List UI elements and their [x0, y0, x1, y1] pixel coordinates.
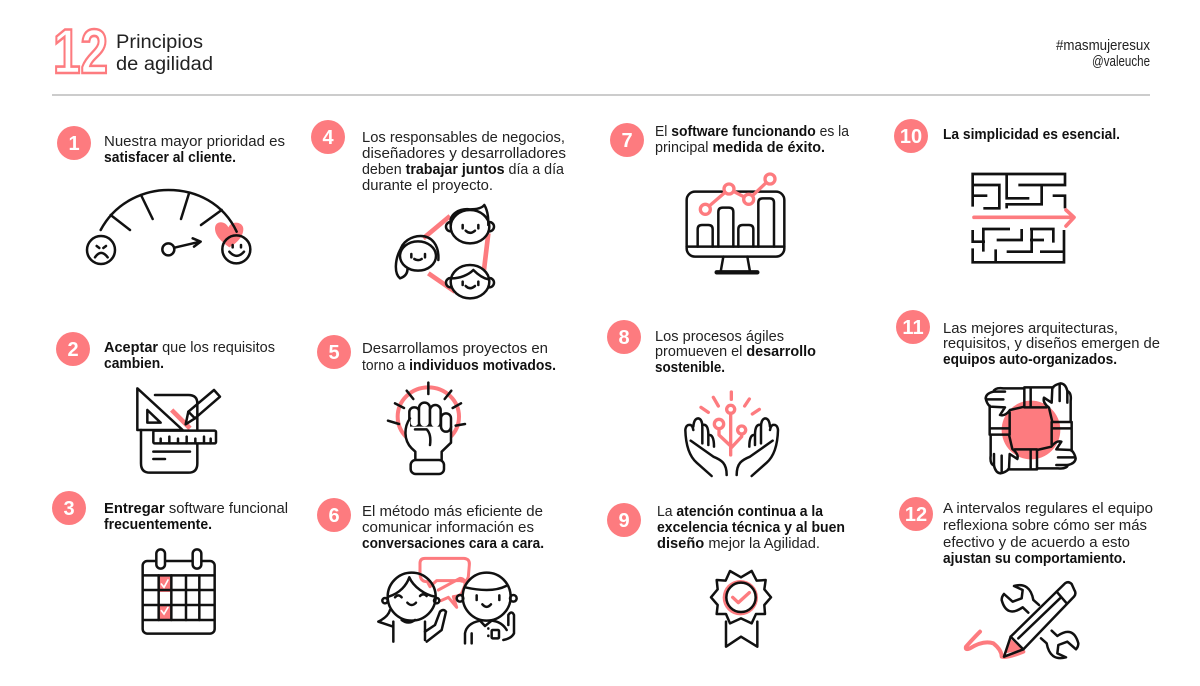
panel: principle 6 — [317, 498, 544, 643]
text 12: ajustan su comportamiento. — [943, 551, 1126, 567]
badge 6: 6 — [328, 505, 340, 527]
badge 8 — [607, 320, 641, 354]
icon: monitor with chart — [687, 174, 784, 272]
text 8 — [655, 329, 816, 376]
text 12: efectivo y de acuerdo a esto — [943, 535, 1130, 551]
badge 9 — [607, 503, 641, 537]
badge 7: 7 — [621, 130, 633, 152]
panel: principle 8 — [607, 320, 816, 476]
text 7: principal medida de éxito. — [655, 140, 825, 156]
text 11: Las mejores arquitecturas, — [943, 321, 1118, 337]
panel: principle 11 — [896, 310, 1160, 473]
icon: three connected people — [396, 205, 494, 298]
text 6: comunicar información es — [362, 520, 534, 536]
panel: principle 7 — [610, 123, 850, 272]
text 2 — [104, 340, 275, 372]
icon: satisfaction gauge — [87, 190, 250, 264]
icon: drawing tools — [137, 388, 220, 473]
badge 3: 3 — [63, 498, 75, 520]
text 2: cambien. — [104, 356, 164, 372]
text 10: La simplicidad es esencial. — [943, 127, 1120, 143]
text 12: reflexiona sobre cómo ser más — [943, 518, 1147, 534]
badge 12: 12 — [905, 504, 927, 526]
badge 4: 4 — [322, 127, 334, 149]
text 8: Los procesos ágiles — [655, 329, 784, 345]
badge 5 — [317, 335, 351, 369]
text 4 — [362, 130, 566, 194]
icon: hands growing a tree — [685, 392, 778, 476]
text 12: A intervalos regulares el equipo — [943, 501, 1153, 517]
badge 10: 10 — [900, 126, 922, 148]
text 3: frecuentemente. — [104, 517, 212, 533]
text 1: satisfacer al cliente. — [104, 150, 236, 166]
text 9 — [657, 504, 845, 552]
text 2: Aceptar que los requisitos — [104, 340, 275, 356]
text 11: equipos auto-organizados. — [943, 352, 1117, 368]
badge 6 — [317, 498, 351, 532]
hashtag and handle — [1056, 38, 1151, 70]
text 4: Los responsables de negocios, — [362, 130, 565, 146]
icon: four linked hands — [986, 383, 1076, 473]
badge 8: 8 — [618, 327, 630, 349]
text 4: diseñadores y desarrolladores — [362, 146, 566, 162]
panel: principle 9 — [607, 503, 845, 647]
badge 12 — [899, 497, 933, 531]
text 7: El software funcionando es la — [655, 124, 850, 140]
hashtag and handle: #masmujeresux — [1056, 38, 1151, 54]
badge 3 — [52, 491, 86, 525]
text 12 — [943, 501, 1153, 567]
text 8: promueven el desarrollo — [655, 344, 816, 360]
icon: wrench and pencil — [966, 582, 1078, 658]
panel: principle 4 — [311, 120, 566, 298]
text 9: diseño mejor la Agilidad. — [657, 536, 820, 552]
badge 5: 5 — [328, 342, 340, 364]
panel: principle 5 — [317, 335, 556, 474]
badge 1: 1 — [68, 133, 80, 155]
title — [116, 32, 213, 75]
text 6: conversaciones cara a cara. — [362, 536, 544, 552]
text 5 — [362, 341, 556, 374]
title number 12: 12 — [53, 17, 108, 87]
text 5: torno a individuos motivados. — [362, 358, 556, 374]
text 5: Desarrollamos proyectos en — [362, 341, 548, 357]
icon: quality award ribbon — [711, 571, 771, 647]
text 1 — [104, 134, 285, 166]
panel: principle 2 — [56, 332, 275, 473]
text 8: sostenible. — [655, 360, 725, 376]
title: de agilidad — [116, 54, 213, 75]
badge 11 — [896, 310, 930, 344]
text 9: La atención continua a la — [657, 504, 824, 520]
text 3 — [104, 501, 288, 533]
icon: calendar — [143, 549, 215, 634]
text 1: Nuestra mayor prioridad es — [104, 134, 285, 150]
icon: maze with arrow — [973, 174, 1074, 262]
hashtag and handle: @valeuche — [1092, 54, 1150, 70]
panel: principle 3 — [52, 491, 288, 634]
header — [53, 17, 1151, 87]
panel: principle 12 — [899, 497, 1153, 658]
text 9: excelencia técnica y al buen — [657, 520, 845, 536]
text 7 — [655, 124, 850, 156]
badge 7 — [610, 123, 644, 157]
text 3: Entregar software funcional — [104, 501, 288, 517]
badge 1 — [57, 126, 91, 160]
panel: principle 1 — [57, 126, 285, 264]
text 4: deben trabajar juntos día a día — [362, 162, 565, 178]
badge 11: 11 — [902, 317, 924, 339]
badge 2: 2 — [67, 339, 79, 361]
badge 10 — [894, 119, 928, 153]
icon: raised fist — [388, 383, 465, 474]
badge 9: 9 — [618, 510, 630, 532]
text 6 — [362, 504, 544, 552]
panel: principle 10 — [894, 119, 1120, 262]
title: Principios — [116, 32, 203, 53]
text 11: requisitos, y diseños emergen de — [943, 336, 1160, 352]
badge 2 — [56, 332, 90, 366]
text 4: durante el proyecto. — [362, 178, 493, 194]
icon: two people talking — [378, 558, 517, 643]
badge 4 — [311, 120, 345, 154]
text 11 — [943, 321, 1160, 368]
text 6: El método más eficiente de — [362, 504, 543, 520]
